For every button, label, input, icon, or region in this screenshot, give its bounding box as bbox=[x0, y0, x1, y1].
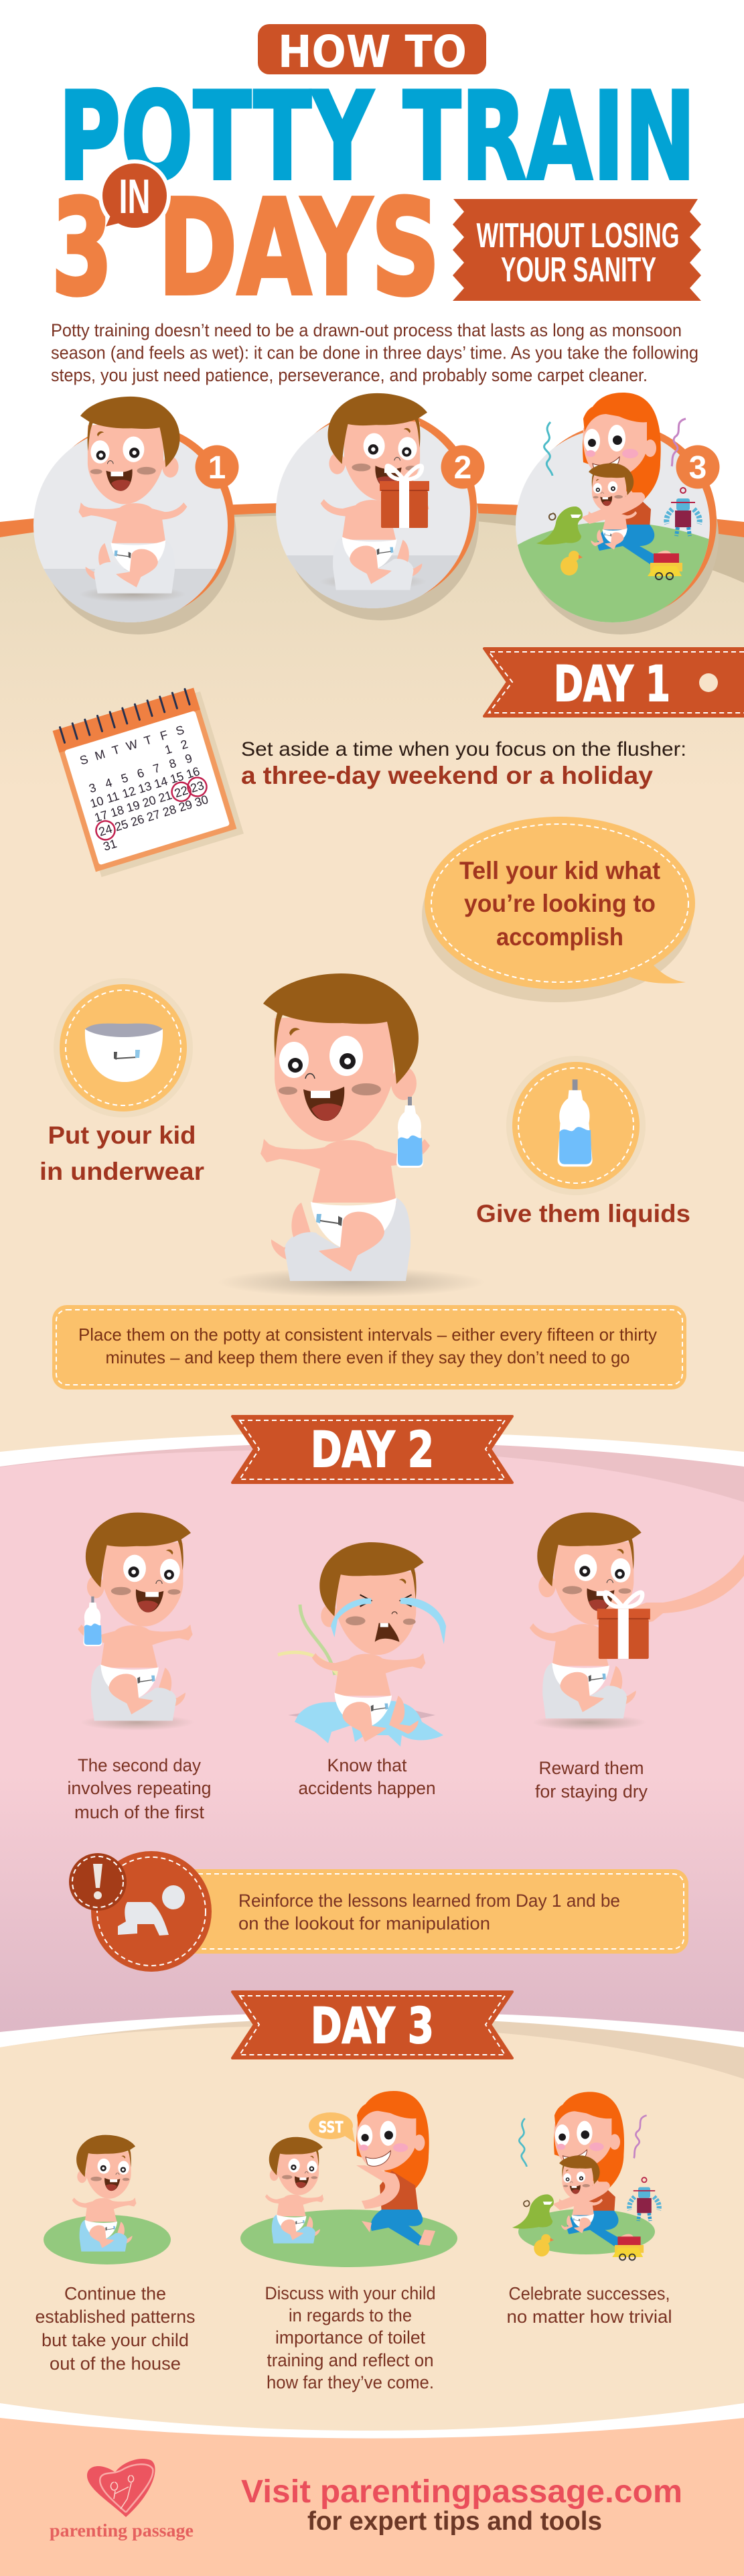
calendar: T bbox=[143, 733, 153, 748]
calendar: 29 bbox=[177, 797, 194, 814]
day 3 captions bbox=[35, 2283, 672, 2392]
badge 2 bbox=[441, 445, 485, 489]
calendar: S bbox=[78, 752, 90, 768]
day 2 ribbon bbox=[232, 1416, 512, 1483]
calendar: 20 bbox=[141, 793, 157, 810]
calendar: 11 bbox=[105, 789, 121, 805]
day 3 ribbon: DAY 3 bbox=[311, 1998, 434, 2055]
calendar: 12 bbox=[121, 784, 137, 801]
day 2 baby with bottle bbox=[78, 1513, 194, 1731]
day 2 ribbon: DAY 2 bbox=[311, 1422, 434, 1479]
day 2 captions: for staying dry bbox=[535, 1781, 648, 1802]
put your kid label: Put your kid bbox=[48, 1122, 196, 1149]
footer background bbox=[0, 2403, 744, 2576]
speech bubble: you’re looking to bbox=[464, 890, 656, 917]
day 3 captions: Discuss with your child bbox=[265, 2283, 435, 2303]
step circle 1 bbox=[33, 397, 238, 634]
potty interval note bbox=[52, 1305, 686, 1389]
day 2 captions: Reward them bbox=[538, 1758, 644, 1778]
day 3 captions: training and reflect on bbox=[267, 2350, 434, 2370]
day 3 ribbon bbox=[232, 1992, 512, 2058]
top arc band bbox=[0, 502, 744, 1474]
calendar: 7 bbox=[151, 761, 162, 776]
title: without losing your sanity banner bbox=[453, 199, 701, 301]
day 3 captions: Celebrate successes, bbox=[509, 2283, 670, 2303]
day 3 captions: importance of toilet bbox=[275, 2327, 426, 2348]
calendar: 21 bbox=[157, 789, 173, 805]
day 3 captions: no matter how trivial bbox=[506, 2307, 672, 2327]
day 3 mother talking with child bbox=[240, 2091, 457, 2267]
step circle 3 bbox=[516, 393, 719, 634]
speech bubble: accomplish bbox=[496, 923, 623, 951]
day 2 captions: involves repeating bbox=[67, 1778, 212, 1798]
day 1 ribbon: DAY 1 bbox=[554, 656, 670, 713]
sst speech bubble: SST bbox=[319, 2119, 344, 2137]
badge 1: 1 bbox=[208, 450, 226, 486]
calendar: 5 bbox=[119, 771, 130, 786]
day 2 background bbox=[0, 1432, 744, 2077]
title: in bubble: IN bbox=[119, 170, 150, 224]
badge 2: 2 bbox=[454, 450, 471, 486]
baby 1 bbox=[78, 397, 187, 594]
intro paragraph: Potty training doesn’t need to be a drawn-out process that lasts as long as monsoon bbox=[51, 320, 682, 340]
day 2 captions: accidents happen bbox=[299, 1778, 435, 1798]
day 3 baby outside bbox=[44, 2135, 171, 2264]
footer call to action: Visit parentingpassage.com bbox=[241, 2474, 682, 2510]
badge 3: 3 bbox=[689, 450, 706, 486]
day 3 captions: out of the house bbox=[50, 2354, 181, 2374]
title: how to: HOW TO bbox=[278, 26, 467, 78]
calendar: 24 bbox=[97, 822, 114, 839]
day 3 captions: how far they’ve come. bbox=[267, 2372, 434, 2392]
title: in bubble bbox=[98, 159, 171, 232]
day 3 captions: but take your child bbox=[42, 2330, 189, 2350]
title: 3 days: DAYS bbox=[158, 172, 440, 325]
reinforce callout: Reinforce the lessons learned from Day 1 and be bbox=[238, 1891, 620, 1911]
reinforce callout: on the lookout for manipulation bbox=[238, 1913, 490, 1934]
calendar: 18 bbox=[108, 803, 125, 820]
calendar: 27 bbox=[145, 807, 162, 824]
calendar bbox=[52, 687, 244, 877]
calendar: 13 bbox=[137, 779, 153, 796]
calendar: 31 bbox=[102, 837, 119, 854]
put your kid label: in underwear bbox=[40, 1158, 204, 1185]
speech bubble: Tell your kid what bbox=[459, 857, 660, 884]
title: without losing your sanity banner: YOUR SANITY bbox=[501, 251, 656, 289]
toys and streamers bbox=[536, 419, 700, 580]
day 3 captions: established patterns bbox=[35, 2307, 196, 2327]
title: 3 days bbox=[52, 172, 440, 325]
badge 1 bbox=[196, 445, 238, 489]
crawling baby badge bbox=[91, 1851, 212, 1972]
calendar: 14 bbox=[153, 774, 169, 791]
footer call to action: for expert tips and tools bbox=[307, 2507, 602, 2536]
potty interval note: Place them on the potty at consistent intervals – either every fifteen or thirty bbox=[78, 1325, 657, 1345]
day 3 background bbox=[0, 2012, 744, 2479]
set aside text bbox=[241, 738, 686, 789]
calendar: 8 bbox=[167, 756, 177, 771]
underwear icon bbox=[54, 978, 193, 1117]
day 2 captions: The second day bbox=[78, 1755, 202, 1775]
sst speech bubble bbox=[309, 2112, 355, 2143]
day 3 captions: in regards to the bbox=[289, 2305, 412, 2325]
day 2 captions: Know that bbox=[327, 1755, 407, 1775]
calendar: T bbox=[110, 742, 121, 758]
day 3 captions: Continue the bbox=[64, 2283, 166, 2303]
bottle icon bbox=[506, 1056, 646, 1195]
day 2 captions: much of the first bbox=[74, 1802, 205, 1822]
big baby with bottle bbox=[218, 973, 486, 1297]
footer call to action bbox=[241, 2474, 682, 2536]
calendar: 6 bbox=[135, 766, 146, 781]
calendar: 19 bbox=[125, 798, 141, 815]
title bbox=[52, 24, 701, 325]
calendar: 23 bbox=[189, 778, 206, 795]
green hill bbox=[516, 522, 710, 630]
calendar: 25 bbox=[113, 817, 130, 834]
calendar: F bbox=[159, 728, 169, 743]
set aside text: a three-day weekend or a holiday bbox=[241, 762, 653, 789]
intro paragraph: steps, you just need patience, perseverance, and probably some carpet cleaner. bbox=[51, 365, 648, 385]
calendar: 22 bbox=[173, 783, 190, 800]
calendar: 16 bbox=[185, 764, 202, 781]
day 2 captions bbox=[67, 1755, 648, 1822]
put your kid label bbox=[40, 1122, 204, 1185]
calendar: M bbox=[93, 747, 106, 763]
potty interval note: minutes – and keep them there even if they say they don’t need to go bbox=[106, 1347, 629, 1367]
calendar: 10 bbox=[88, 794, 105, 811]
day 1 ribbon bbox=[484, 649, 744, 716]
speech bubble bbox=[422, 817, 695, 1002]
give them liquids label: Give them liquids bbox=[476, 1200, 690, 1227]
calendar: 9 bbox=[183, 751, 194, 766]
calendar: W bbox=[125, 737, 139, 753]
logo: parenting passage: parenting passage bbox=[50, 2520, 194, 2540]
intro paragraph: season (and feels as wet): it can be done in three days’ time. As you take the following bbox=[51, 343, 698, 363]
day 2 baby with gift and adult arm bbox=[530, 1513, 744, 1731]
calendar: 3 bbox=[87, 781, 98, 795]
step circle 2 bbox=[276, 393, 485, 620]
gift box bbox=[380, 466, 429, 528]
mother and baby bbox=[581, 393, 671, 566]
baby 2 bbox=[321, 393, 429, 590]
calendar: 28 bbox=[161, 803, 178, 819]
set aside text: Set aside a time when you focus on the flusher: bbox=[241, 738, 686, 760]
warning badge bbox=[69, 1853, 127, 1911]
calendar: S bbox=[174, 723, 185, 738]
logo: parenting passage bbox=[50, 2459, 194, 2540]
calendar: 2 bbox=[179, 737, 190, 752]
calendar: 1 bbox=[163, 742, 173, 757]
calendar: 26 bbox=[129, 812, 146, 829]
day 3 celebration scene bbox=[512, 2092, 659, 2260]
reinforce callout bbox=[69, 1851, 688, 1972]
intro paragraph bbox=[51, 320, 698, 385]
calendar: 4 bbox=[103, 776, 114, 791]
calendar: 30 bbox=[193, 793, 210, 809]
title: 3 days: 3 bbox=[52, 172, 113, 325]
badge 3 bbox=[676, 445, 719, 489]
calendar: 15 bbox=[169, 769, 185, 786]
day 2 crying baby with puddle bbox=[278, 1542, 446, 1747]
calendar: 17 bbox=[93, 808, 110, 825]
